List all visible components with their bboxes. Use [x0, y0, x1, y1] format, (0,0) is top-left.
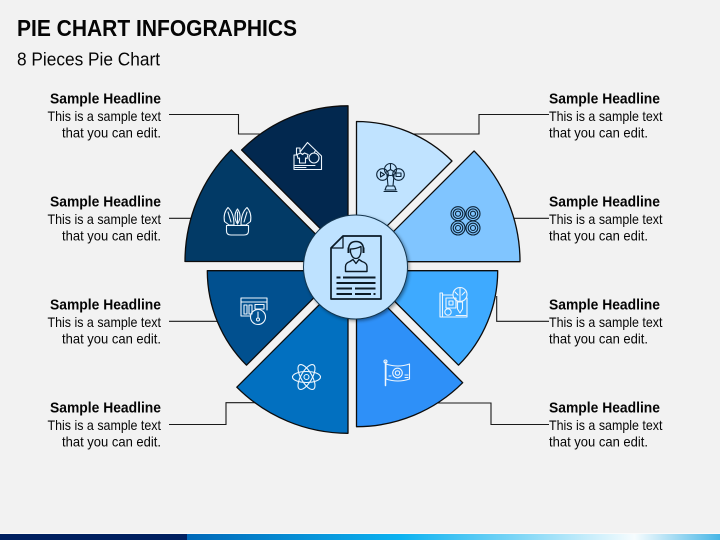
icon: tree of media circles — [377, 164, 404, 192]
pie segment: bottom right — [356, 276, 463, 427]
pie segment: bottom left — [237, 276, 348, 433]
text block: left 2: that you can edit. — [62, 228, 161, 244]
text block: left 1 — [48, 90, 161, 140]
text block: right 2 — [549, 193, 663, 244]
icon: blueprint and brain — [440, 288, 467, 317]
pie segment: top left — [242, 106, 348, 256]
pie segment: top right — [356, 121, 452, 257]
text block: right 1 — [549, 90, 663, 140]
text block: left 2 — [48, 193, 161, 244]
text block: left 3: This is a sample text — [48, 314, 161, 330]
text block: left 1: that you can edit. — [62, 124, 161, 140]
footer bar — [0, 533, 720, 540]
text block: left 4: that you can edit. — [62, 434, 161, 450]
text block: right 2: that you can edit. — [549, 228, 648, 244]
text block: right 2: Sample Headline — [549, 193, 660, 210]
text block: left 4 — [48, 399, 161, 450]
text block: left 4: Sample Headline — [50, 399, 161, 416]
text block: right 3 — [549, 296, 663, 346]
text block: right 3: that you can edit. — [549, 330, 648, 346]
icon: atom — [292, 362, 320, 392]
icon: dashboard with gauge — [241, 298, 267, 324]
text block: left 1: Sample Headline — [50, 90, 161, 107]
icon: resume document with person — [331, 236, 381, 299]
text block: right 3: Sample Headline — [549, 296, 660, 313]
center circle — [304, 215, 408, 319]
text block: right 4: that you can edit. — [549, 434, 648, 450]
pie segment: lower right — [364, 271, 498, 365]
text block: right 4 — [549, 399, 663, 450]
subtitle: 8 Pieces Pie Chart — [17, 50, 160, 70]
icon: flag — [384, 360, 410, 386]
connector lines — [169, 114, 549, 424]
text block: right 1: that you can edit. — [549, 124, 648, 140]
text block: right 2: This is a sample text — [549, 211, 663, 227]
pie segment: lower left — [207, 271, 341, 365]
title: PIE CHART INFOGRAPHICS — [17, 15, 297, 41]
text block: right 1: Sample Headline — [549, 90, 660, 107]
text block: right 1: This is a sample text — [549, 108, 663, 124]
pie segment: upper left — [185, 150, 343, 262]
text block: left 3 — [48, 296, 161, 346]
text block: right 4: Sample Headline — [549, 399, 660, 416]
pie segment: upper right — [363, 151, 520, 262]
text block: left 4: This is a sample text — [48, 417, 161, 433]
text block: left 3: Sample Headline — [50, 296, 161, 313]
icon: four concentric circles — [451, 207, 480, 235]
icon: house with shirt and apple — [294, 142, 322, 170]
text block: left 2: Sample Headline — [50, 193, 161, 210]
text block: right 4: This is a sample text — [549, 417, 663, 433]
text block: left 1: This is a sample text — [48, 108, 161, 124]
text block: left 3: that you can edit. — [62, 330, 161, 346]
text block: right 3: This is a sample text — [549, 314, 663, 330]
icon: plant in pot — [224, 208, 251, 235]
text block: left 2: This is a sample text — [48, 211, 161, 227]
